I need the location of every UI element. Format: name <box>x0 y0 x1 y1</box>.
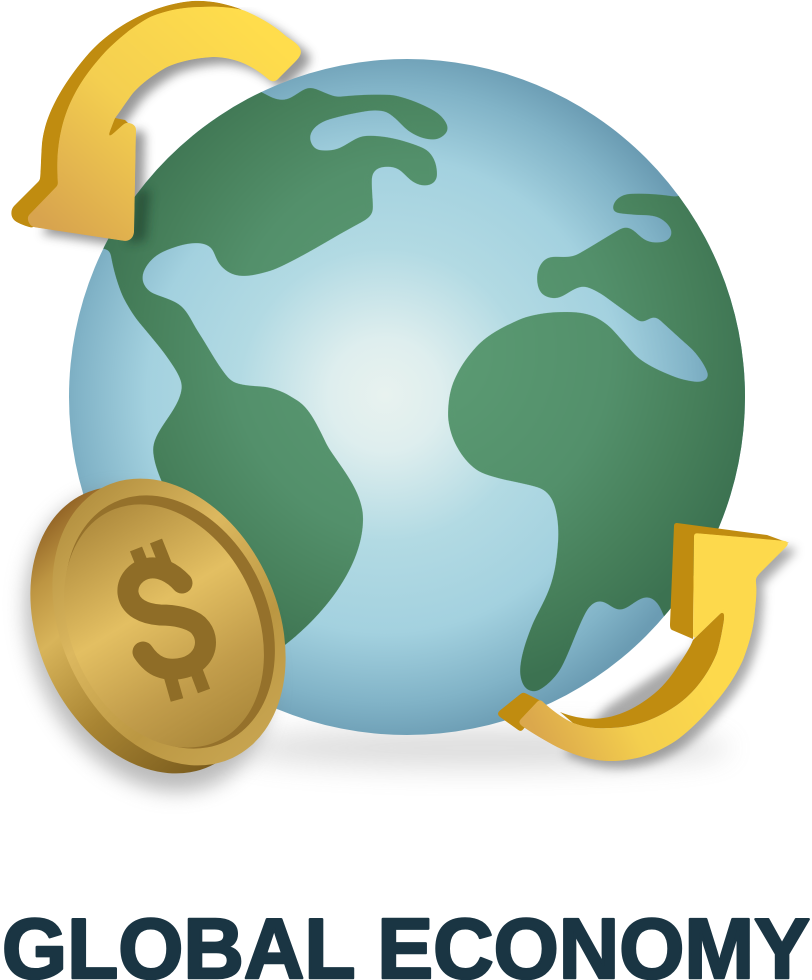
arrow front face <box>28 7 301 241</box>
coin rim <box>8 440 330 804</box>
arrow: bottom right <box>498 523 789 761</box>
continents <box>103 88 745 692</box>
arrow side face <box>11 1 243 228</box>
coin cast shadow <box>0 452 317 832</box>
arrow shadow on globe <box>128 190 150 244</box>
coin edge <box>0 448 308 812</box>
coin <box>0 440 330 832</box>
arrow shadow: top left on white <box>42 14 310 248</box>
coin face <box>26 472 302 780</box>
icon: dollar sign <box>128 541 206 700</box>
ocean sphere <box>69 59 745 735</box>
ground shadow <box>230 728 730 768</box>
arrow: top left <box>11 1 301 241</box>
landmass: Eurasia and Africa <box>448 194 745 692</box>
arrow tail side face <box>498 692 545 732</box>
arrow head side face <box>670 523 789 639</box>
coin rim groove <box>25 461 315 783</box>
globe <box>60 59 800 735</box>
arrow front face <box>519 533 788 761</box>
arrow shadow: bottom right on white <box>564 540 795 768</box>
arrow inner side face <box>560 612 724 728</box>
arrow notch side <box>107 118 130 138</box>
landmass: the Americas <box>103 88 448 645</box>
